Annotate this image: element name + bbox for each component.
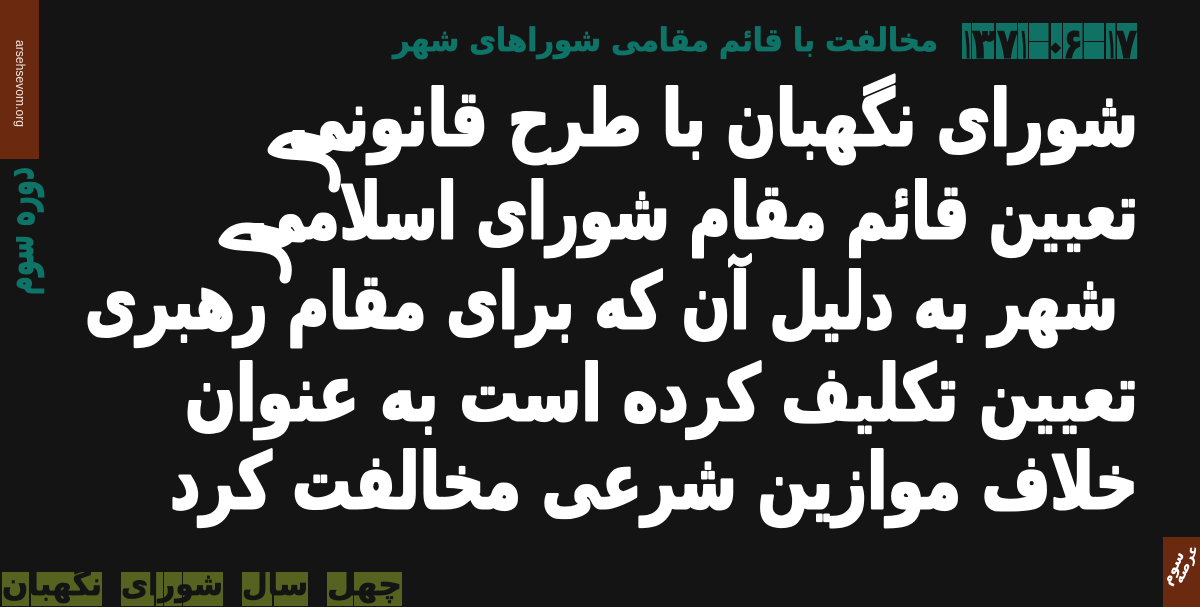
logo panel: سوم: [1157, 548, 1188, 588]
brand panel: website: arsehsevom.org: [13, 40, 27, 127]
swoosh: line 2 final letter: [224, 228, 301, 278]
subtitle: مخالفت با قائم مقامی شوراهای شهر: [391, 21, 938, 59]
date stamp: ۷: [997, 19, 1018, 68]
date stamp: ۱: [963, 19, 972, 68]
date stamp: ۷: [1116, 19, 1137, 68]
logo panel: [1157, 537, 1200, 607]
date stamp: ۶: [1063, 19, 1083, 68]
date stamp: ۱: [1107, 19, 1116, 68]
series title stamp: سال: [242, 565, 308, 603]
series title stamp: [2, 565, 402, 606]
swoosh: line 1 final letter: [273, 137, 350, 187]
date stamp: ۳: [972, 19, 995, 68]
headline: [85, 74, 1138, 527]
date stamp: ۱: [1020, 19, 1028, 68]
date stamp: [962, 19, 1137, 68]
brand panel: website: [0, 0, 39, 159]
series title stamp: چهل: [327, 565, 402, 603]
series title stamp: شورای: [121, 565, 223, 603]
series title stamp: نگهبان: [2, 565, 102, 603]
